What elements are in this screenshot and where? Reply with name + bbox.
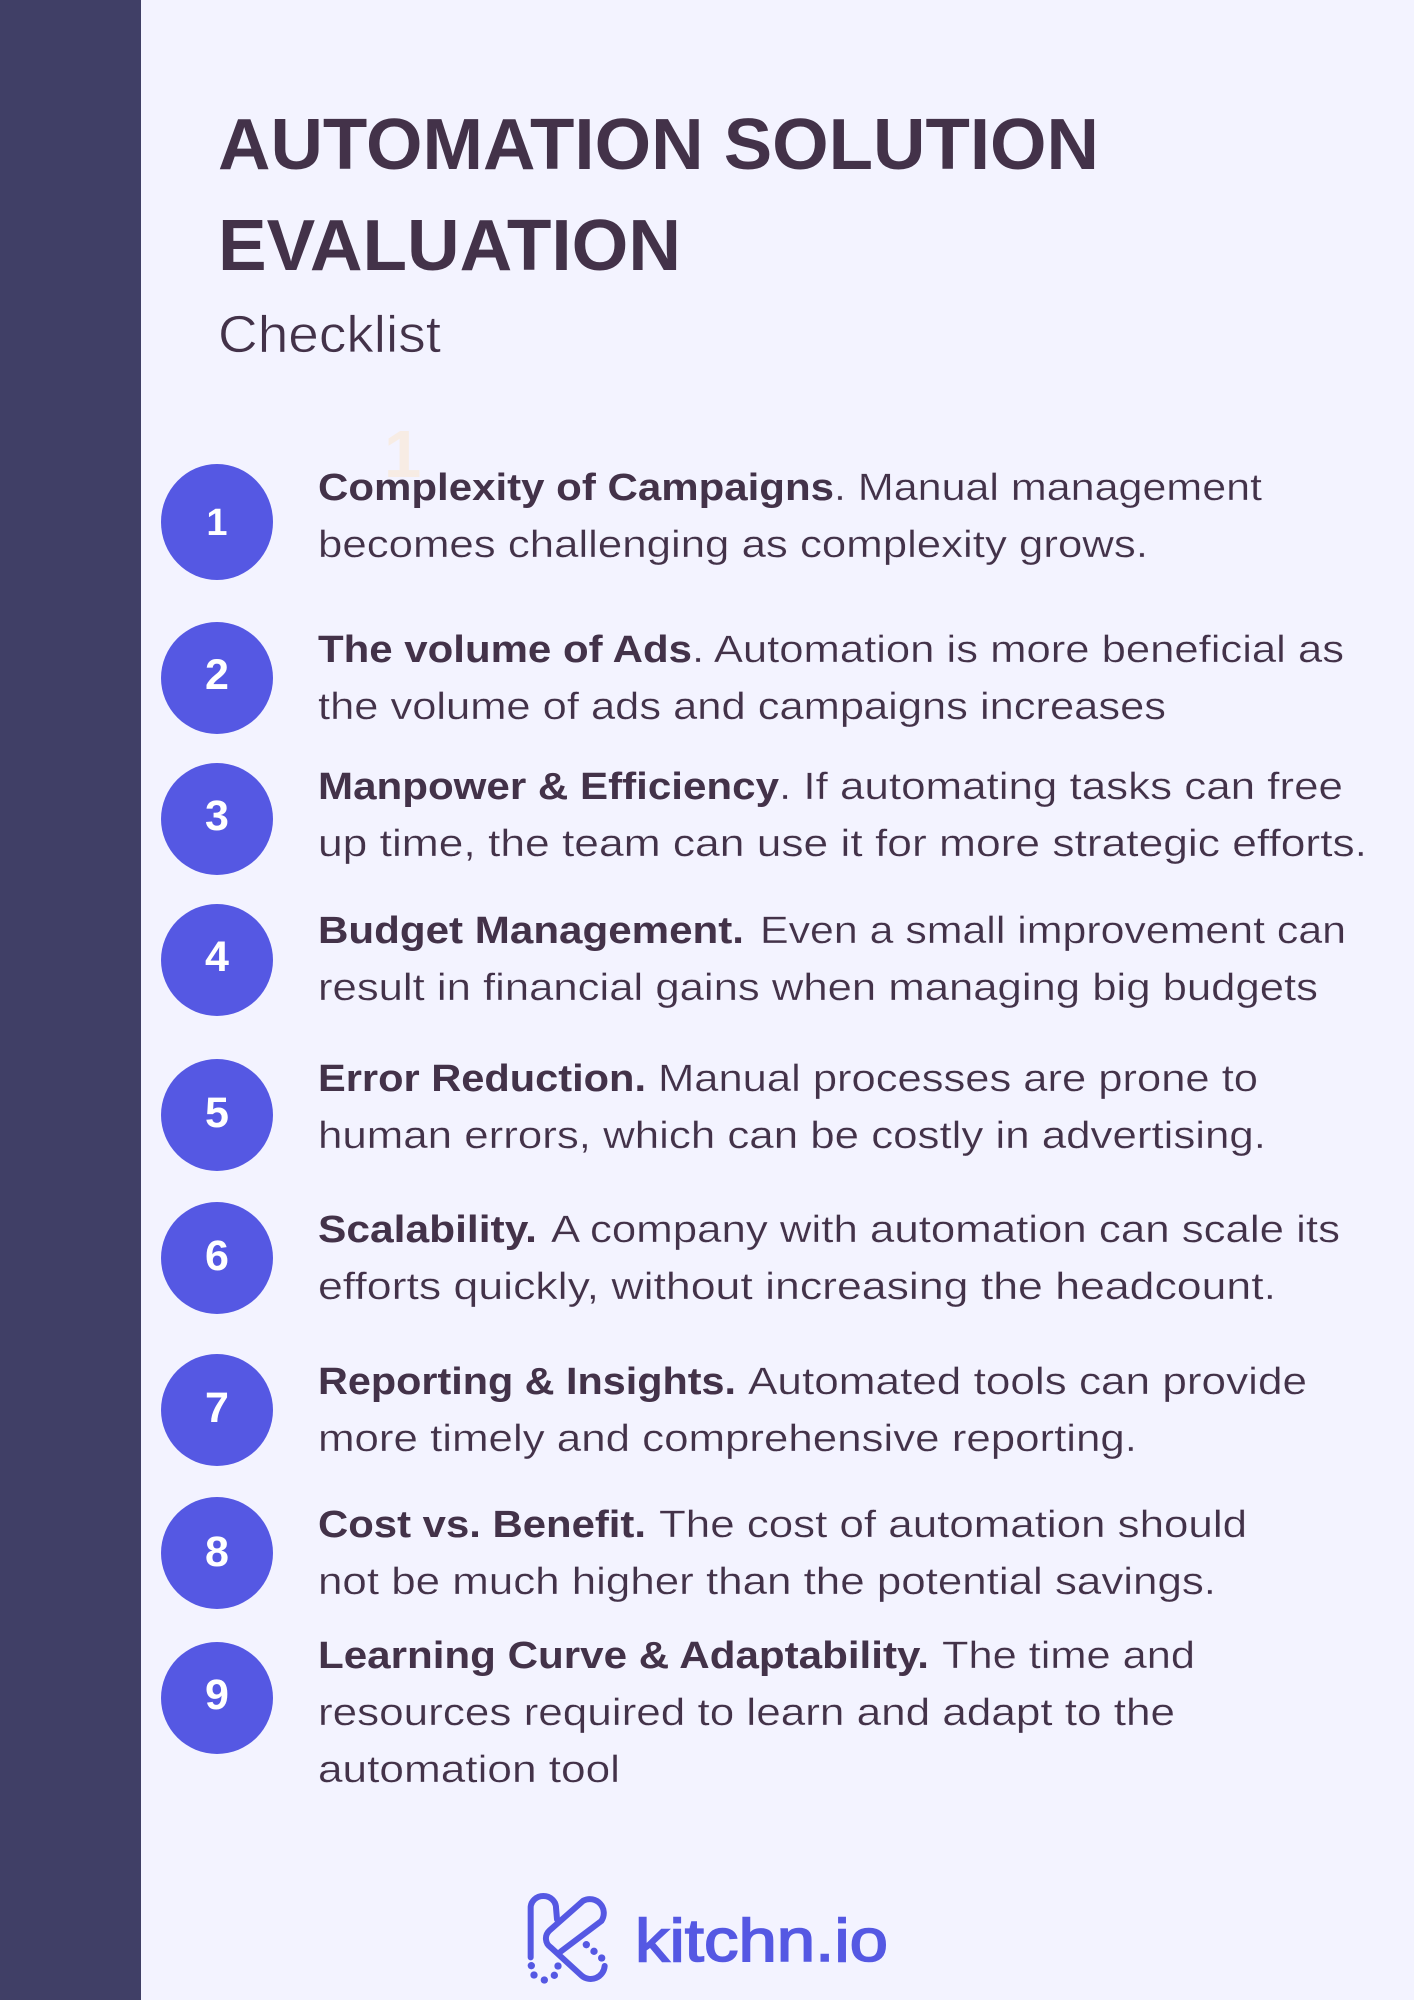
item 4 text <box>318 910 1346 1009</box>
item 7 <box>161 1354 1307 1466</box>
item 5 <box>161 1058 1266 1171</box>
number badge 5 <box>161 1059 273 1171</box>
item 3 <box>161 763 1367 875</box>
number badge 8: 8 <box>205 1528 229 1576</box>
number badge 6: 6 <box>205 1232 229 1280</box>
item 3 text <box>318 766 1367 865</box>
title: AUTOMATION SOLUTION <box>218 105 1099 185</box>
number badge 4 <box>161 904 273 1016</box>
item 5 text: Manual processes are prone to <box>658 1058 1258 1100</box>
item 7 text: Automated tools can provide <box>748 1361 1307 1403</box>
number badge 9 <box>161 1642 273 1754</box>
number badge 7 <box>161 1354 273 1466</box>
item 5 text: Error Reduction. <box>318 1058 646 1100</box>
number badge 6 <box>161 1202 273 1314</box>
number badge 2 <box>161 622 273 734</box>
logo: kitchn.io <box>528 1896 888 1984</box>
item 2 text: the volume of ads and campaigns increases <box>318 686 1166 728</box>
item 1 text: . Manual management <box>834 467 1262 509</box>
item 1 text <box>318 467 1262 566</box>
item 1 text: becomes challenging as complexity grows. <box>318 524 1148 566</box>
wordmark: kitchn.io <box>635 1907 888 1974</box>
item 6 text: efforts quickly, without increasing the headcount. <box>318 1266 1276 1308</box>
number badge 8 <box>161 1497 273 1609</box>
icon: kitchn K mark <box>528 1896 605 1984</box>
item 4 <box>161 904 1346 1016</box>
item 2 text <box>318 629 1344 728</box>
number badge 1: 1 <box>206 502 228 544</box>
item 1 text: Complexity of Campaigns <box>318 467 834 509</box>
number badge 5: 5 <box>205 1089 229 1137</box>
subtitle: Checklist <box>218 306 442 364</box>
item 8 text: not be much higher than the potential savings. <box>318 1561 1216 1603</box>
ghost number: 1 <box>384 417 421 492</box>
item 3 text: up time, the team can use it for more strategic efforts. <box>318 823 1367 865</box>
item 8 text <box>318 1504 1247 1603</box>
item 4 text: Budget Management. <box>318 910 744 952</box>
item 8 <box>161 1497 1247 1609</box>
item 4 text: Even a small improvement can <box>760 910 1346 952</box>
number badge 3 <box>161 763 273 875</box>
number badge 3: 3 <box>205 792 229 840</box>
item 9 text: resources required to learn and adapt to the <box>318 1692 1175 1734</box>
item 2 text: The volume of Ads <box>318 629 692 671</box>
item 8 text: Cost vs. Benefit. <box>318 1504 646 1546</box>
number badge 4: 4 <box>205 933 229 981</box>
item 1 <box>161 464 1262 580</box>
item 9 text: automation tool <box>318 1749 620 1791</box>
item 9 <box>161 1635 1195 1791</box>
number badge 1 <box>161 464 273 580</box>
item 7 text <box>318 1361 1307 1460</box>
item 9 text: Learning Curve & Adaptability. <box>318 1635 929 1677</box>
item 9 text <box>318 1635 1195 1791</box>
item 5 text <box>318 1058 1266 1157</box>
title <box>218 105 1099 286</box>
title: EVALUATION <box>218 206 681 286</box>
item 3 text: Manpower & Efficiency <box>318 766 779 808</box>
sidebar <box>0 0 141 2000</box>
number badge 9: 9 <box>205 1671 229 1719</box>
item 7 text: more timely and comprehensive reporting. <box>318 1418 1137 1460</box>
item 6 text: A company with automation can scale its <box>551 1209 1340 1251</box>
item 2 text: . Automation is more beneficial as <box>692 629 1344 671</box>
number badge 2: 2 <box>205 651 229 699</box>
number badge 7: 7 <box>205 1384 229 1432</box>
item 6 <box>161 1202 1340 1314</box>
item 9 text: The time and <box>942 1635 1195 1677</box>
item 2 <box>161 622 1344 734</box>
item 6 text <box>318 1209 1340 1308</box>
item 3 text: . If automating tasks can free <box>779 766 1343 808</box>
item 5 text: human errors, which can be costly in advertising. <box>318 1115 1266 1157</box>
item 7 text: Reporting & Insights. <box>318 1361 736 1403</box>
item 8 text: The cost of automation should <box>659 1504 1247 1546</box>
item 6 text: Scalability. <box>318 1209 537 1251</box>
item 4 text: result in financial gains when managing big budgets <box>318 967 1318 1009</box>
